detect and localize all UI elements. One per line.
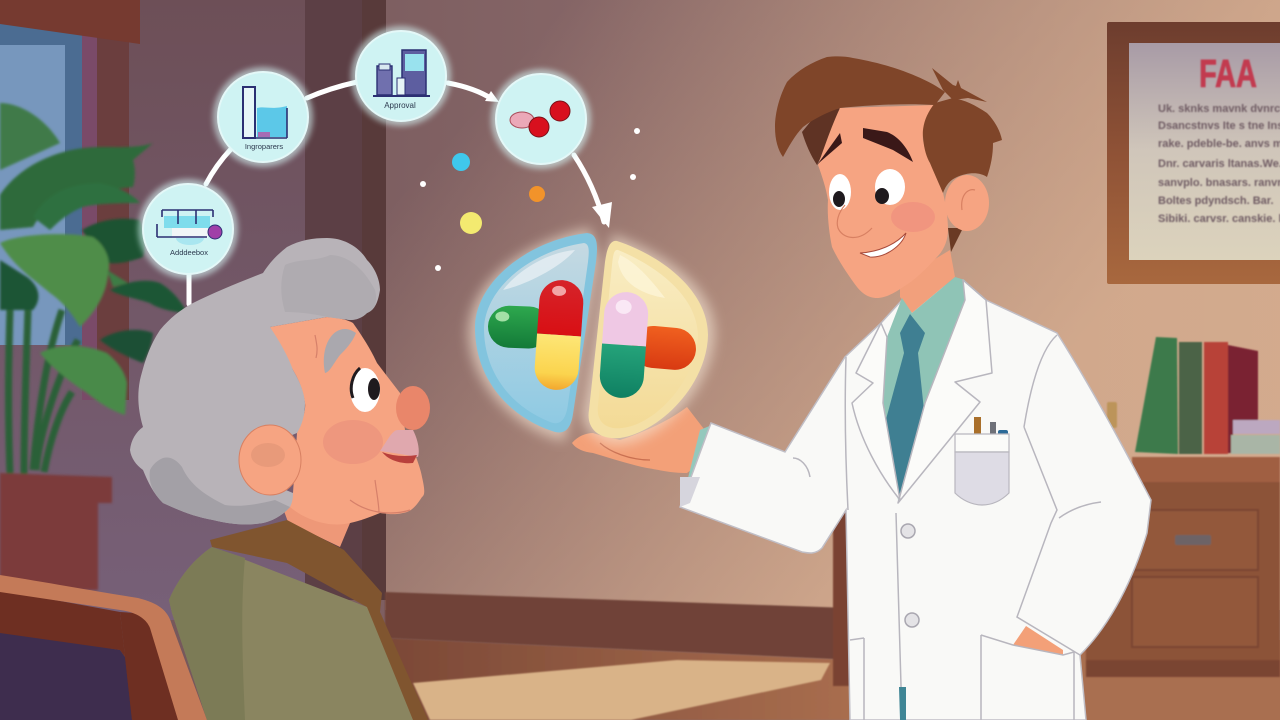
combination pill held up [468, 228, 715, 445]
breast pocket with pens [955, 417, 1009, 505]
doctor ear [945, 175, 989, 231]
patient eye [350, 368, 380, 412]
doctor [572, 56, 1151, 720]
patient hair shading [150, 457, 290, 524]
doctor inner sleeve [680, 477, 700, 507]
coat seam lines [793, 335, 1101, 720]
step circle: approval [351, 26, 451, 126]
framed FAA poster [1107, 22, 1280, 284]
step circle: second stage [213, 67, 313, 167]
patient jacket [169, 547, 425, 720]
arrow head: to combination pill [592, 202, 612, 228]
doctor eyes [829, 174, 851, 210]
patient collar [210, 520, 428, 720]
step circle: approval: Approval [384, 101, 416, 110]
plant in pot [0, 103, 187, 590]
step circle: second stage: Ingroparers [245, 142, 283, 151]
lab coat [680, 280, 1151, 720]
yellow half [589, 241, 708, 438]
poster body text: Boltes pdyndsch. Bar. [1158, 195, 1274, 207]
hand in coat pocket [1013, 626, 1063, 655]
doctor face [818, 105, 948, 298]
doctor smile [860, 233, 906, 257]
doctor trousers [899, 687, 906, 720]
patient ear [239, 425, 301, 495]
coat buttons [901, 524, 919, 627]
pot [0, 473, 112, 590]
doctor eyebrows [817, 128, 913, 165]
doctor nose [837, 205, 872, 237]
doctor lapels [852, 280, 992, 503]
wooden cabinet with books [833, 337, 1280, 686]
doctor tie [885, 314, 925, 497]
books [1135, 337, 1178, 454]
process arc [138, 26, 612, 304]
green capsule [487, 305, 551, 349]
plant leaves [82, 219, 145, 263]
poster heading: FAA [1199, 53, 1257, 96]
blue half [475, 233, 597, 432]
patient eyebrow [324, 329, 356, 373]
step circle: first stage [138, 179, 238, 279]
pill glow [468, 228, 715, 445]
pink and green capsule [598, 291, 650, 399]
doctor side hair [923, 98, 1002, 193]
doctor hair behind [948, 228, 963, 252]
poster body text [1158, 103, 1280, 225]
patient wrinkles [315, 335, 410, 513]
doctor neck [900, 250, 955, 313]
doctor cuff [688, 424, 714, 480]
patient nose [396, 386, 430, 430]
patient face [270, 317, 424, 525]
step circle: pills [491, 69, 591, 169]
arc connectors [189, 82, 604, 304]
elderly patient [130, 238, 430, 720]
coat lower pocket [981, 635, 1074, 655]
doctor cheek [891, 202, 935, 232]
patient cheek [323, 420, 383, 464]
chair [0, 575, 207, 720]
patient mouth [382, 452, 417, 463]
doctor hand [572, 407, 707, 473]
orange capsule [630, 324, 698, 372]
step circle: first stage: Adddeebox [170, 248, 208, 257]
doctor hair tufts [932, 68, 987, 102]
doctor fringe [775, 56, 945, 157]
red and yellow capsule [533, 279, 585, 391]
doctor shirt [883, 277, 965, 500]
patient neck [280, 500, 395, 547]
plant stems [8, 310, 78, 475]
patient hair [130, 238, 380, 524]
floating particles [420, 128, 640, 271]
patient upper lip [380, 430, 419, 457]
arrow head: to pills [485, 91, 499, 102]
